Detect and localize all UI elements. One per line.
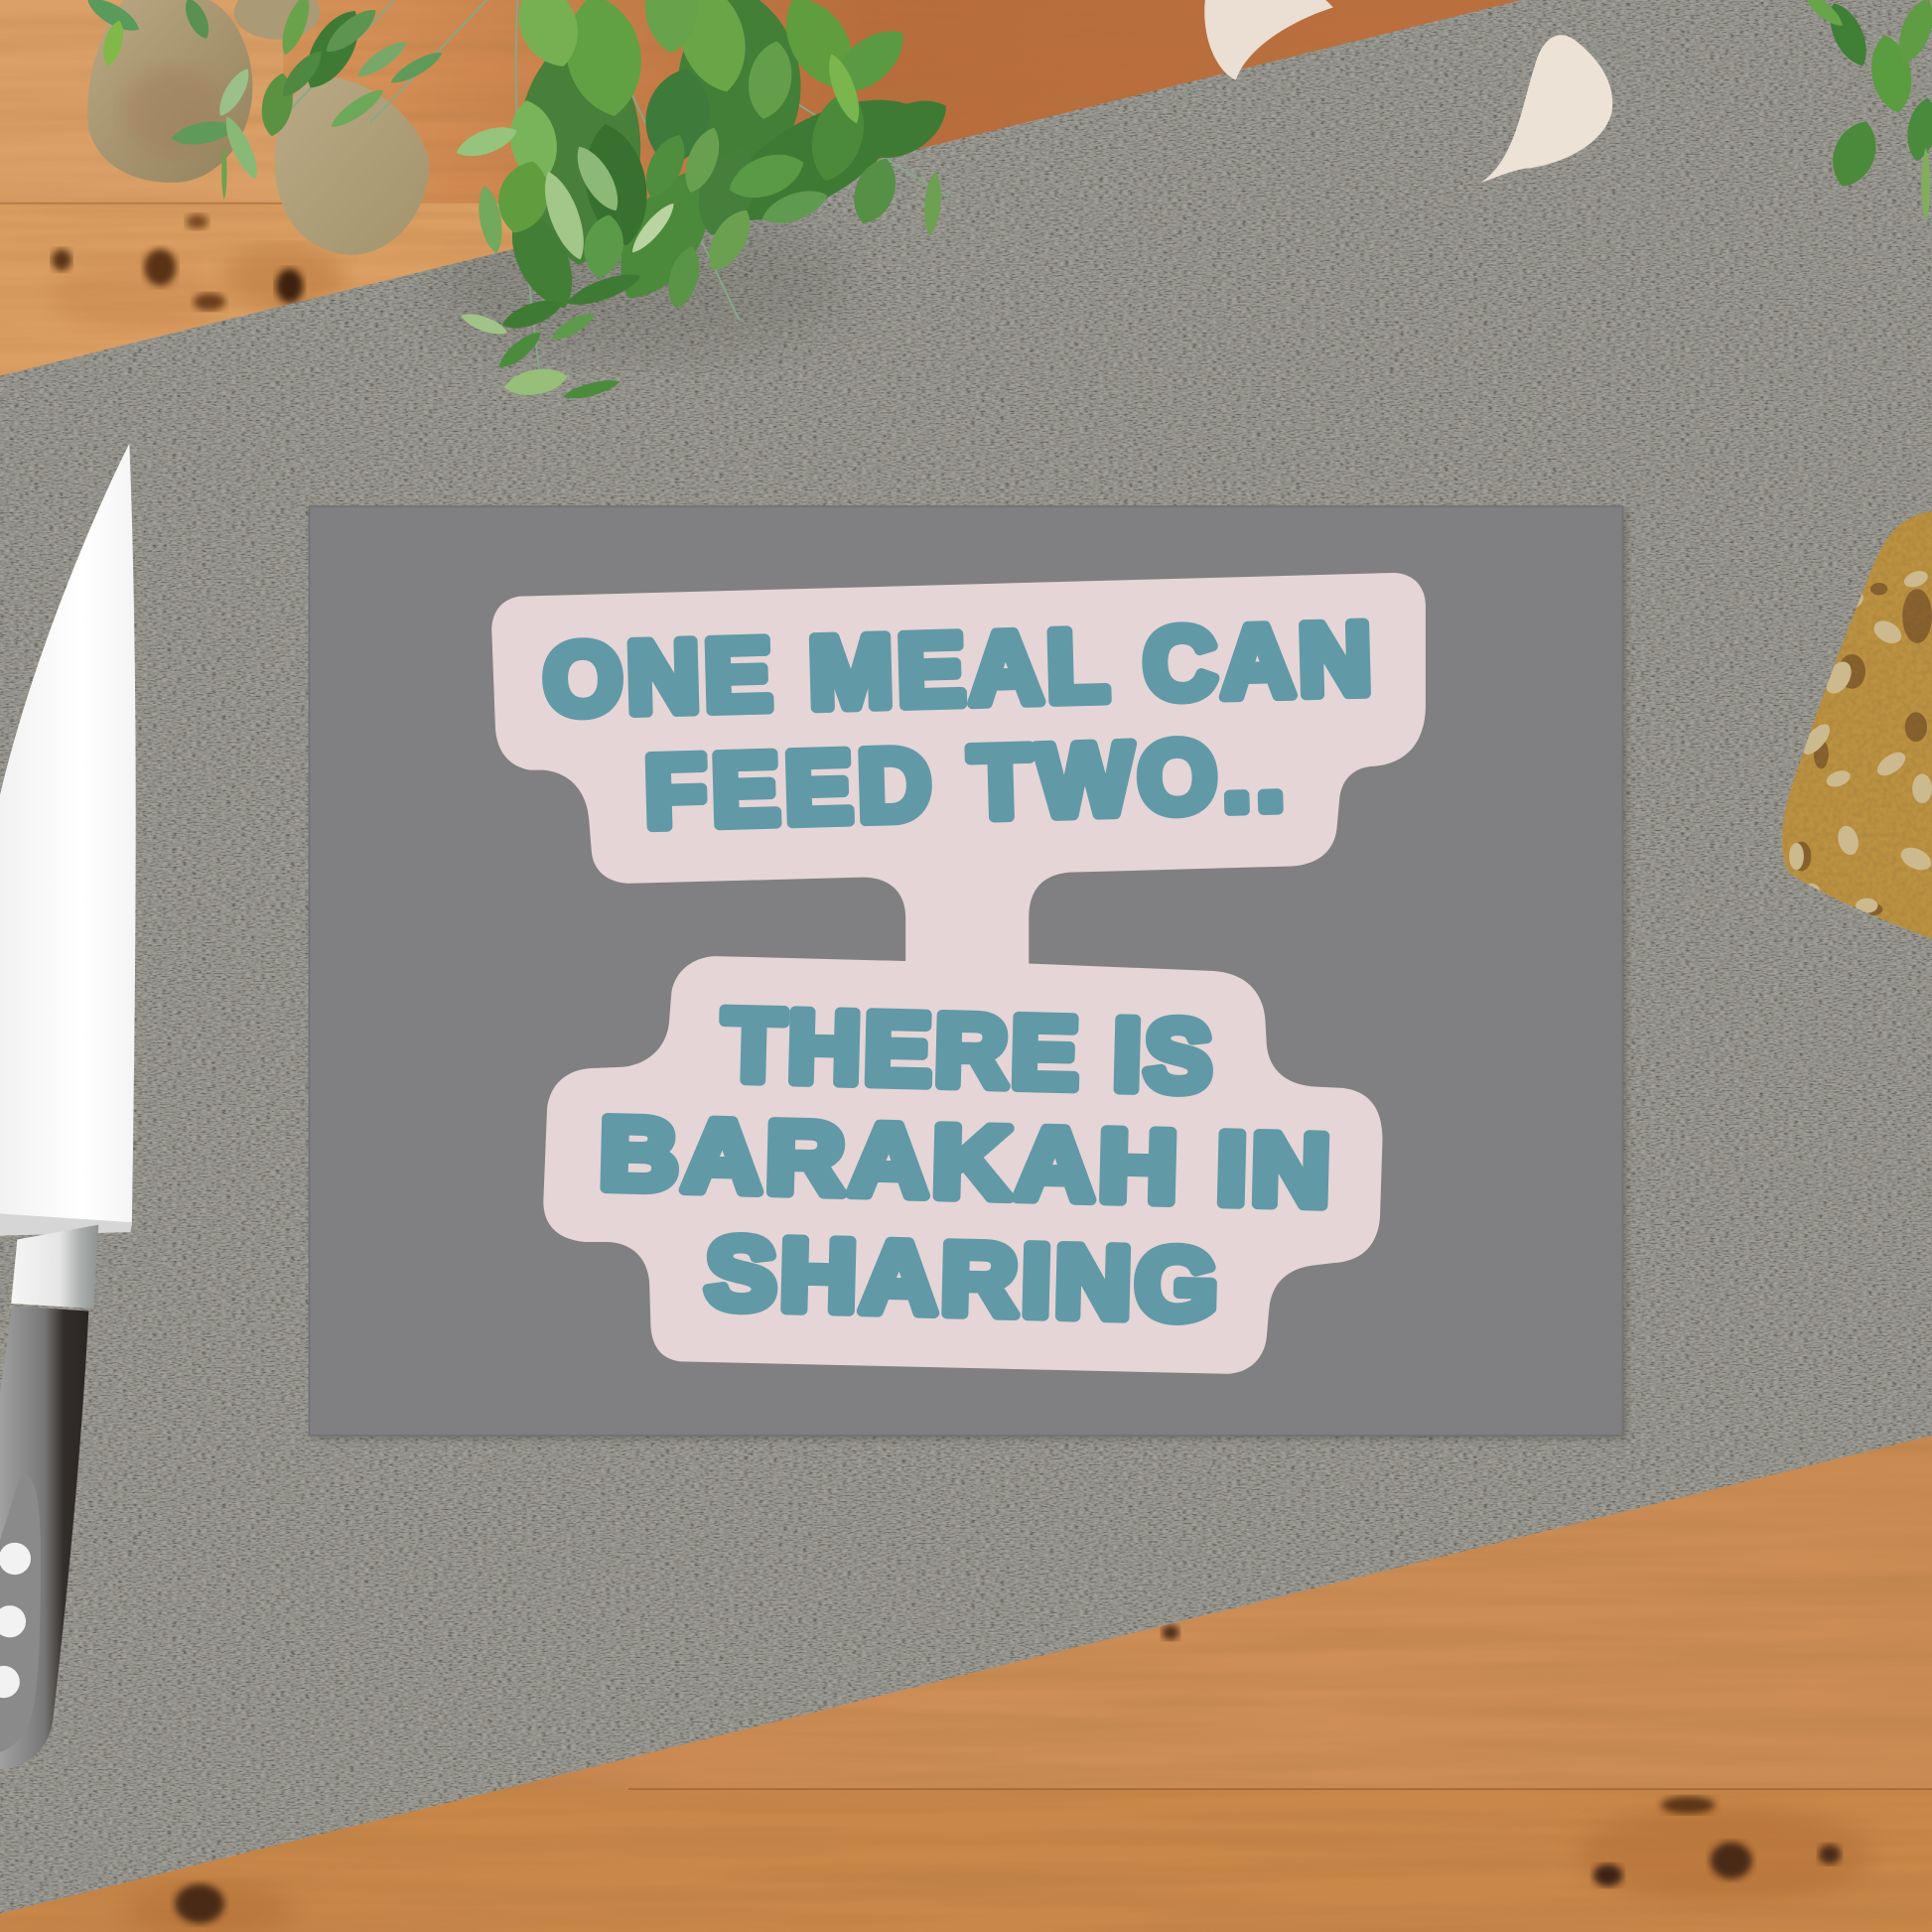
text: BARAKAH IN: BARAKAH IN [599, 1097, 1331, 1227]
text: FEED TWO..: FEED TWO.. [643, 718, 1286, 849]
icon: garlic clove top [1204, 0, 1333, 80]
wooden table bottom plank [0, 1417, 1932, 1932]
icon: chef knife [0, 444, 136, 1769]
wooden table top plank [0, 0, 1932, 382]
pink speech-sign shape [491, 573, 1426, 1374]
icon: bread loaf [1774, 505, 1932, 949]
text: SHARING: SHARING [704, 1217, 1219, 1342]
glass cutting board [310, 506, 1626, 1440]
icon: garlic clove right [1481, 35, 1612, 183]
icon: herb sprigs [83, 0, 1932, 403]
icon: potatoes [87, 0, 429, 255]
text: ONE MEAL CAN: ONE MEAL CAN [542, 602, 1373, 737]
text: THERE IS: THERE IS [722, 988, 1213, 1113]
